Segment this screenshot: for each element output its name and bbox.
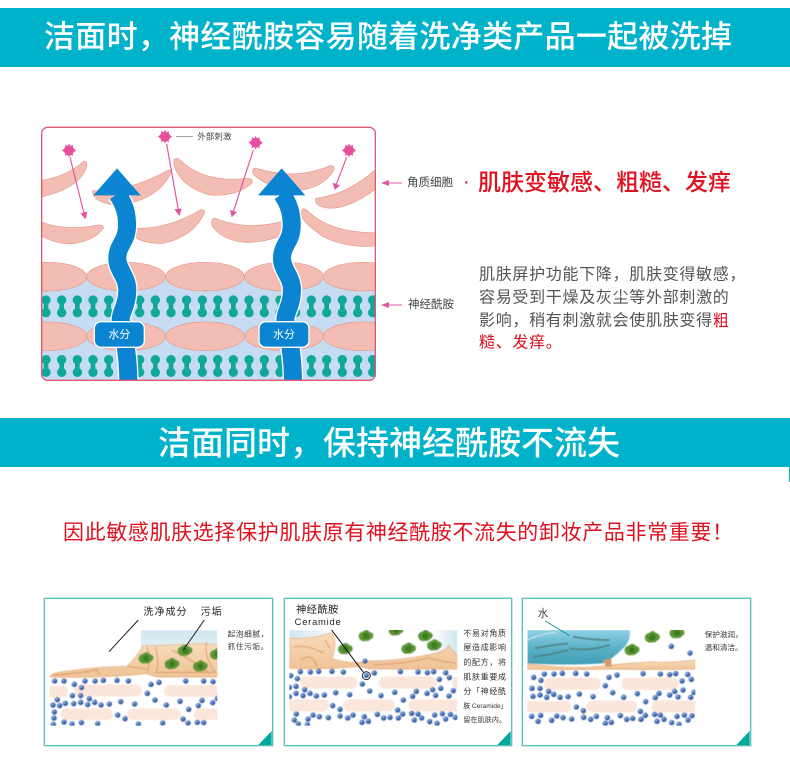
panel: ceramide retained step: Ceramide <box>295 617 341 627</box>
panel: water protection step <box>521 598 751 746</box>
label: corneocytes: 角质细胞 <box>407 175 453 189</box>
panel: ceramide retained step: 胺 Ceramide」 <box>463 701 507 710</box>
panel: water protection step: 温和清洁。 <box>705 642 743 652</box>
panel: water protection step: 保护滋润， <box>705 629 743 639</box>
blue lipid background <box>42 277 375 380</box>
panel: ceramide retained step: 的配方，将 <box>463 657 506 667</box>
label: external stimuli <box>176 132 232 142</box>
panel: ceramide retained step: 肌肤重要成 <box>463 671 506 681</box>
text block: barrier explanation: 肌肤屏护功能下降，肌肤变得敏感， <box>479 266 746 284</box>
ceramide molecules <box>41 295 377 377</box>
text block: barrier explanation: 影响，稍有刺激就会使肌肤变得粗 <box>479 312 730 330</box>
panel: ceramide retained step: 屋造成影响 <box>463 642 506 652</box>
banner: top heading <box>0 8 790 67</box>
label: ceramide: 神经酰胺 <box>408 297 454 311</box>
panel: ceramide retained step: 神经酰胺 <box>296 603 338 616</box>
panel: water protection step: 水 <box>538 608 549 620</box>
panel: foaming step: 污垢 <box>201 606 222 618</box>
label: external stimuli: 外部刺激 <box>197 132 232 142</box>
text block: barrier explanation: 糙、发痒。 <box>479 334 563 352</box>
external stimuli arrows <box>62 130 356 219</box>
panel: foaming step <box>44 598 273 746</box>
callout: sensitive skin heading: · <box>463 171 470 193</box>
panel: skin barrier diagram <box>41 126 376 381</box>
panel: foaming step: 起泡细腻， <box>228 628 268 638</box>
text block: barrier explanation: 容易受到干燥及灰尘等外部刺激的 <box>479 288 730 306</box>
arrow: moisture escaping right: 水分 <box>273 328 295 341</box>
panel: ceramide retained step: 不易对角质 <box>463 628 506 638</box>
text block: barrier explanation <box>479 266 746 352</box>
banner: top heading: 洁面时，神经酰胺容易随着洗净类产品一起被洗掉 <box>44 20 732 54</box>
panel: ceramide retained step: 分「神经酰 <box>463 686 506 696</box>
callout: red conclusion: 因此敏感肌肤选择保护肌肤原有神经酰胺不流失的卸妆产品非常重要！ <box>63 522 733 544</box>
callout: sensitive skin heading: 肌肤变敏感、粗糙、发痒 <box>478 169 731 195</box>
arrow: moisture escaping left: 水分 <box>108 328 130 341</box>
arrow: moisture escaping left <box>93 168 144 383</box>
corneocytes: upper crescents <box>42 158 375 351</box>
panel: foaming step: 洗净成分 <box>143 605 187 618</box>
arrow: moisture escaping right <box>258 168 309 383</box>
panel: foaming step: 抓住污垢。 <box>228 641 268 651</box>
label: corneocytes <box>381 175 453 189</box>
banner: second heading: 洁面同时，保持神经酰胺不流失 <box>158 424 620 462</box>
banner: second heading <box>0 418 790 482</box>
panel: ceramide retained step: 留在肌肤内。 <box>463 715 506 724</box>
panel: ceramide retained step <box>283 598 512 746</box>
label: ceramide <box>381 297 454 311</box>
